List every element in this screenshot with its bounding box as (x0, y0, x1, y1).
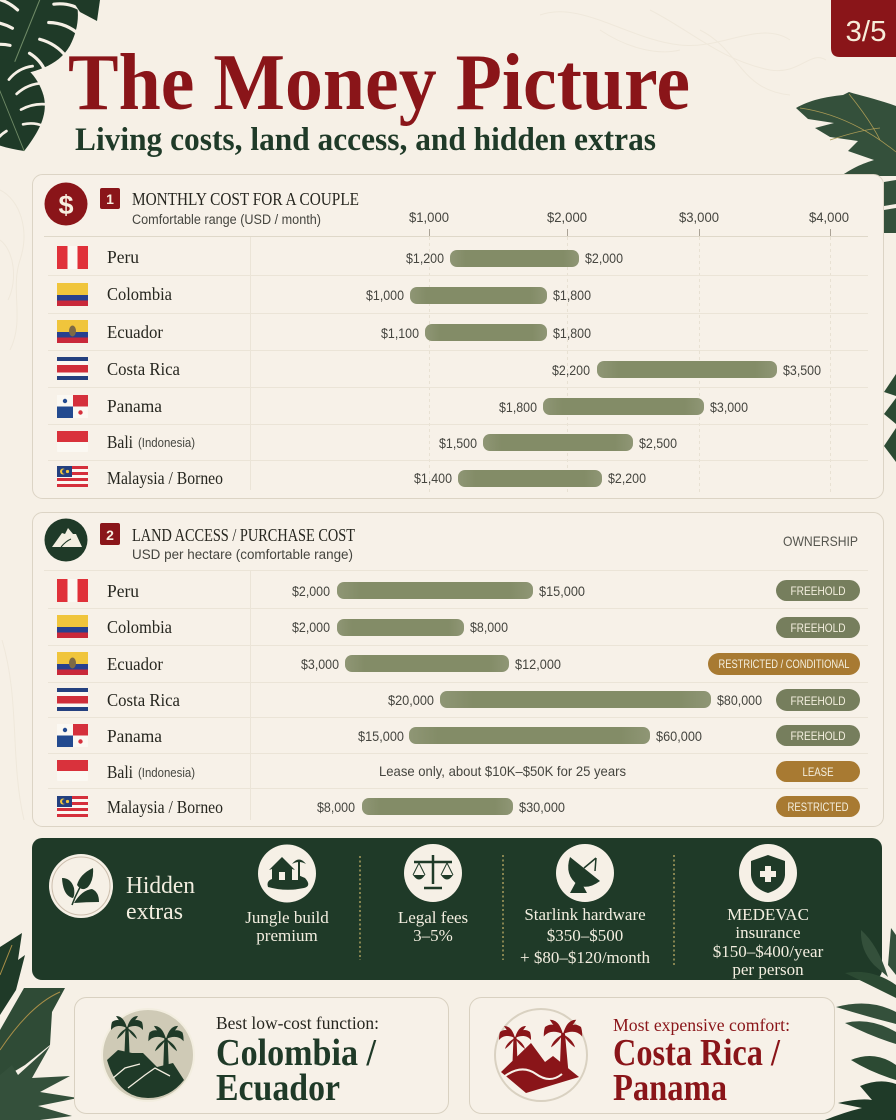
row: Malaysia / Borneo: $30,000 (519, 799, 565, 815)
item: legal fees: 3–5% (413, 926, 453, 945)
row: Panama: $3,000 (710, 399, 748, 415)
leaves: top left (0, 0, 100, 167)
card label: Most expensive comfort: (613, 1015, 790, 1035)
card: most expensive (470, 998, 834, 1114)
item: starlink hardware: $350–$500 (547, 926, 623, 945)
topographic pattern (0, 10, 826, 820)
row: Ecuador: $12,000 (515, 656, 561, 672)
row: Bali (57, 431, 677, 452)
row: Colombia: Colombia (107, 284, 172, 304)
row: Peru (57, 246, 623, 269)
axis: $3,000 (679, 209, 719, 225)
row: Panama: $60,000 (656, 728, 702, 744)
card: best low-cost (74, 998, 448, 1114)
row: Colombia (57, 615, 860, 638)
row: Panama: $1,800 (499, 399, 537, 415)
item: starlink hardware (520, 844, 650, 967)
row: Costa Rica (57, 688, 860, 711)
icon: green mountains and palms (102, 1009, 194, 1101)
item: medevac insurance (713, 844, 824, 979)
axis: $1,000 (409, 209, 449, 225)
row: Panama: FREEHOLD (790, 729, 846, 743)
row: Bali: Bali (107, 762, 133, 782)
row: Colombia: Colombia (107, 617, 172, 637)
leaves: bottom right (825, 928, 896, 1120)
row: Peru: Peru (107, 581, 139, 601)
section number (100, 523, 120, 545)
row: Bali: LEASE (802, 765, 834, 779)
item: legal fees: Legal fees (398, 908, 468, 927)
row: Ecuador: Ecuador (107, 322, 163, 342)
row: Peru: $2,000 (292, 583, 330, 599)
axis: $4,000 (809, 209, 849, 225)
row: Panama: Panama (107, 396, 162, 416)
item: jungle build premium: premium (256, 926, 318, 945)
card value: Panama (613, 1067, 727, 1109)
row: Costa Rica: $20,000 (388, 692, 434, 708)
row: Costa Rica: Costa Rica (107, 690, 180, 710)
section number (100, 188, 120, 209)
icon: mountain (44, 518, 88, 562)
row: Panama (57, 395, 748, 418)
row: Ecuador (57, 320, 591, 343)
card value: Ecuador (216, 1067, 340, 1109)
row: Malaysia / Borneo: $2,200 (608, 470, 646, 486)
label: hidden extras: extras (126, 899, 183, 925)
row: Peru: FREEHOLD (790, 584, 846, 598)
row: Colombia (57, 283, 591, 306)
row: Bali: (Indonesia) (138, 766, 195, 780)
item: legal fees (398, 844, 468, 945)
leaves: bottom left (0, 933, 78, 1120)
row: Bali: $2,500 (639, 435, 677, 451)
heading: subtitle: Living costs, land access, and hidden extras (75, 122, 656, 158)
row: Malaysia / Borneo: Malaysia / Borneo (107, 797, 223, 817)
leaves: right edge (884, 374, 896, 462)
panel: hidden extras (32, 838, 882, 980)
item: medevac insurance: $150–$400/year (713, 942, 824, 961)
row: Malaysia / Borneo: $1,400 (414, 470, 452, 486)
section heading: MONTHLY COST FOR A COUPLE (132, 189, 359, 209)
row: Malaysia / Borneo: RESTRICTED (788, 800, 849, 814)
row: Colombia: FREEHOLD (790, 621, 846, 635)
item: jungle build premium (245, 844, 329, 945)
row: Malaysia / Borneo: $8,000 (317, 799, 355, 815)
leaves: top right (796, 92, 896, 233)
row: Panama (57, 724, 860, 747)
item: medevac insurance: per person (732, 960, 804, 979)
heading: title: The Money Picture (68, 39, 690, 127)
axis (44, 209, 868, 492)
item: jungle build premium: Jungle build (245, 908, 329, 927)
card value: Colombia / (216, 1032, 376, 1074)
row: Bali (57, 760, 860, 782)
section number: 1 (106, 191, 114, 207)
row: Colombia: $8,000 (470, 619, 508, 635)
row: Costa Rica: Costa Rica (107, 359, 180, 379)
section heading: LAND ACCESS / PURCHASE COST (132, 525, 355, 545)
row: Ecuador: $1,100 (381, 325, 419, 341)
row: Panama: Panama (107, 726, 162, 746)
row: Costa Rica (57, 357, 821, 380)
row: Costa Rica: FREEHOLD (790, 694, 846, 708)
icon: dollar (44, 182, 88, 226)
row: Colombia: $1,800 (553, 287, 591, 303)
row: Colombia: $2,000 (292, 619, 330, 635)
row: Bali: (Indonesia) (138, 436, 195, 450)
card value: Costa Rica / (613, 1032, 780, 1074)
row: Peru: $2,000 (585, 250, 623, 266)
row: Colombia: $1,000 (366, 287, 404, 303)
card label: Best low-cost function: (216, 1013, 379, 1033)
item: starlink hardware: + $80–$120/month (520, 948, 650, 967)
page badge (831, 0, 896, 57)
row: Peru: Peru (107, 247, 139, 267)
axis: $2,000 (547, 209, 587, 225)
icon: dollar: $ (58, 190, 74, 220)
row: Bali: Bali (107, 432, 133, 452)
page badge: 3/5 (846, 16, 886, 48)
row: Ecuador: Ecuador (107, 654, 163, 674)
row: Ecuador: RESTRICTED / CONDITIONAL (718, 657, 850, 671)
row rules (44, 570, 868, 820)
icon: leaves (49, 854, 113, 918)
item: medevac insurance: insurance (735, 923, 801, 942)
section subtitle: Comfortable range (USD / month) (132, 212, 321, 227)
panel: land access (32, 512, 884, 826)
row: Bali: Lease only, about $10K–$50K for 25 years (379, 763, 626, 779)
ownership column heading: OWNERSHIP (783, 533, 858, 549)
row: Costa Rica: $2,200 (552, 362, 590, 378)
row: Costa Rica: $80,000 (717, 692, 762, 708)
row: Panama: $15,000 (358, 728, 404, 744)
item: starlink hardware: Starlink hardware (524, 905, 646, 924)
item: medevac insurance: MEDEVAC (727, 905, 809, 924)
section number: 2 (106, 527, 114, 543)
row: Bali: $1,500 (439, 435, 477, 451)
icon: red mountains and palms (495, 1009, 587, 1101)
label: hidden extras: Hidden (126, 873, 195, 899)
row: Ecuador: $1,800 (553, 325, 591, 341)
row: Ecuador (57, 652, 860, 675)
row: Peru: $15,000 (539, 583, 585, 599)
row: Ecuador: $3,000 (301, 656, 339, 672)
row: Peru: $1,200 (406, 250, 444, 266)
row: Malaysia / Borneo: Malaysia / Borneo (107, 468, 223, 488)
section subtitle: USD per hectare (comfortable range) (132, 547, 353, 562)
row: Malaysia / Borneo (57, 466, 646, 488)
row: Costa Rica: $3,500 (783, 362, 821, 378)
panel: monthly cost (32, 174, 884, 498)
row: Peru (57, 579, 860, 602)
row: Malaysia / Borneo (57, 796, 860, 817)
